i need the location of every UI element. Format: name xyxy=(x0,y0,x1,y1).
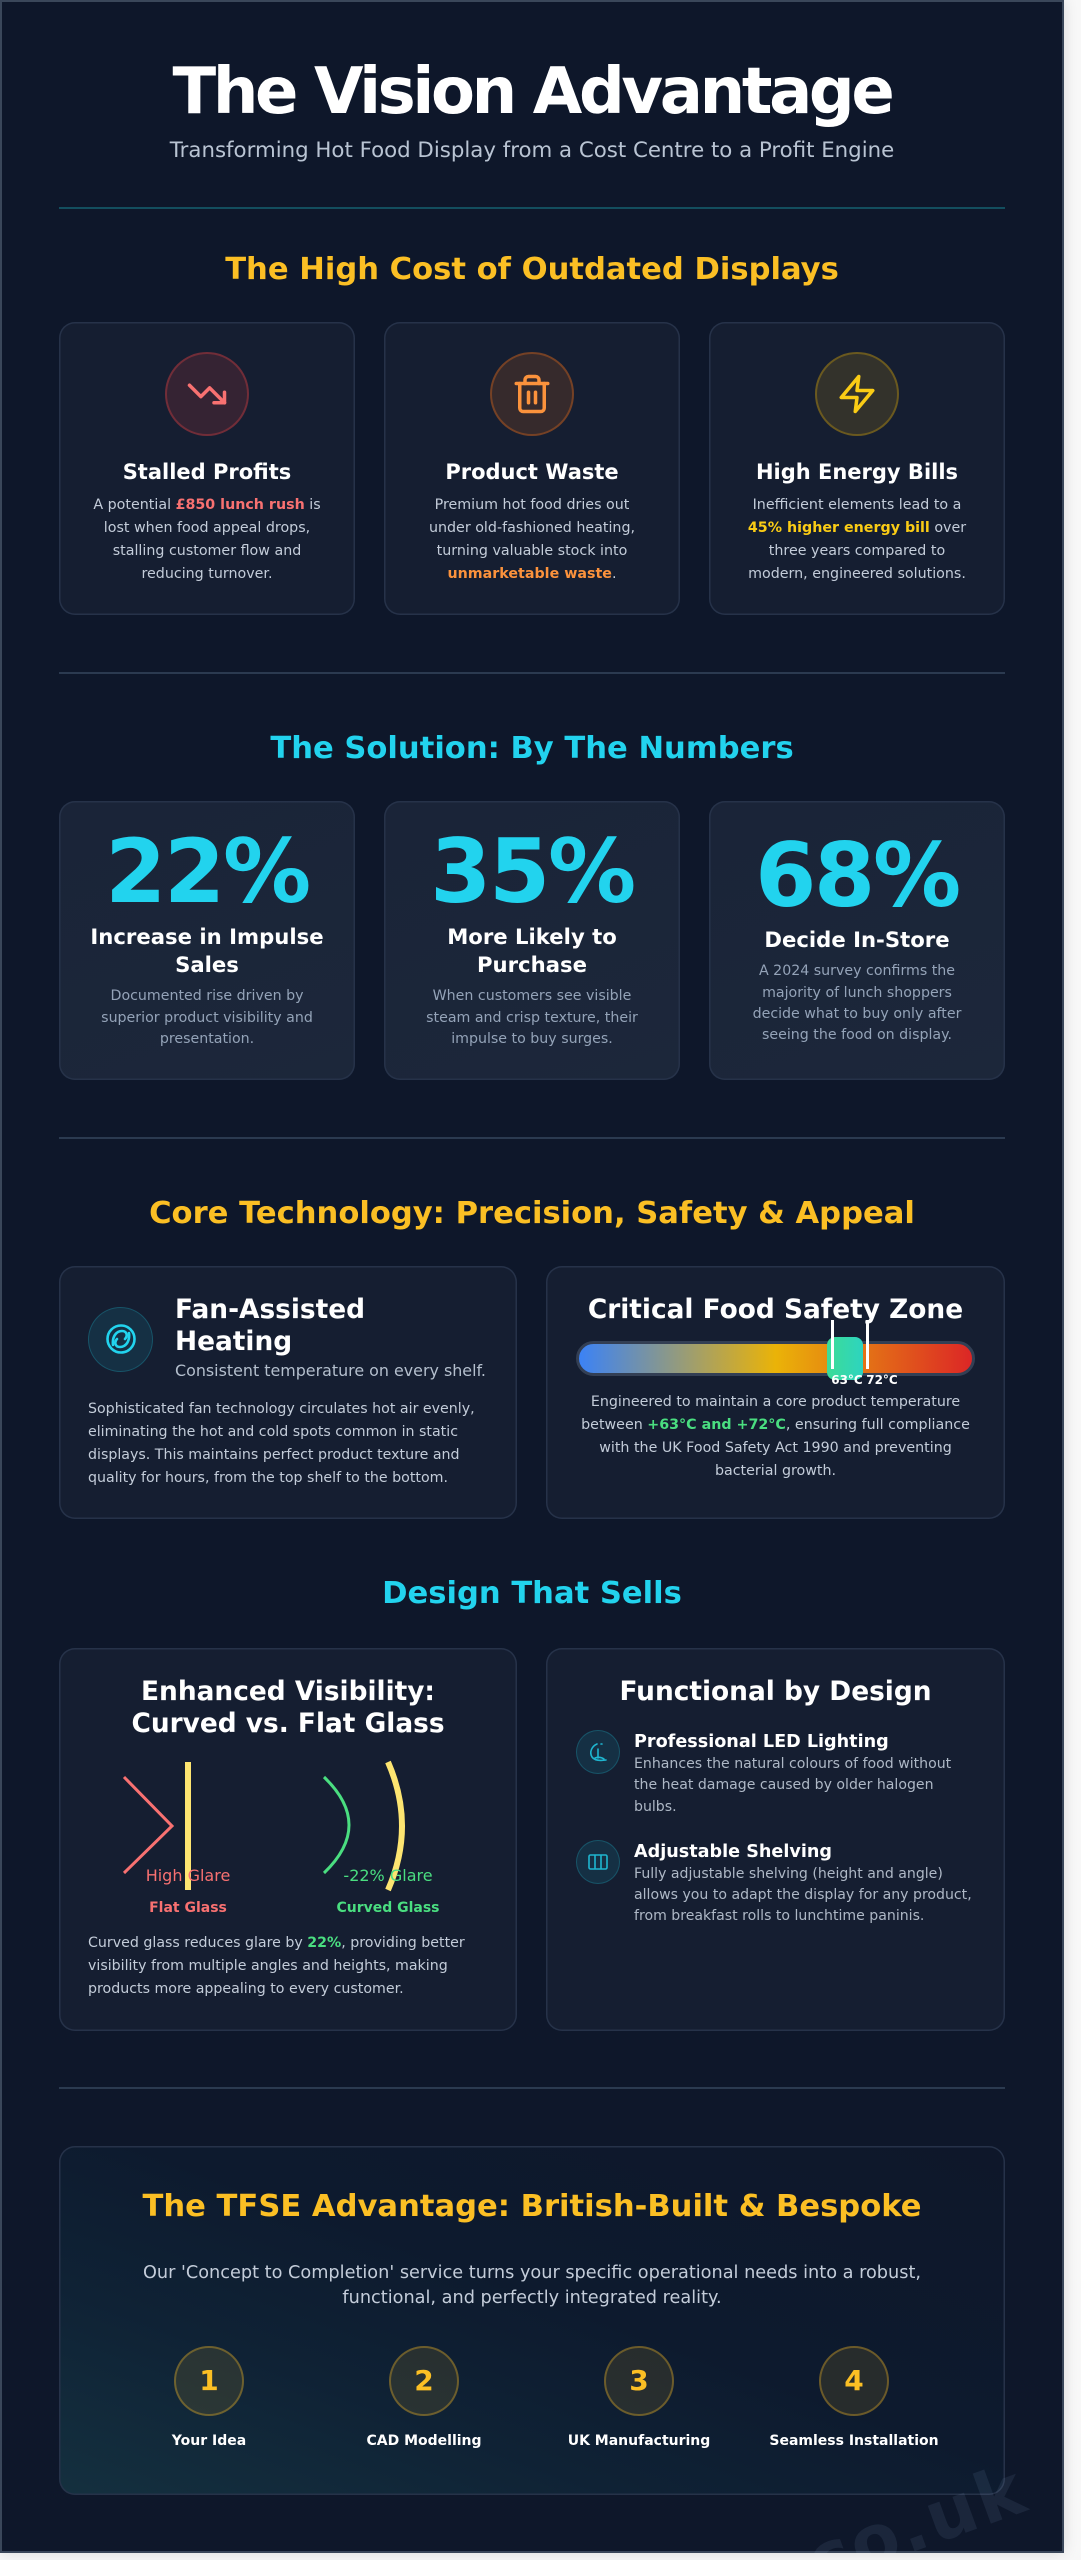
feature title: Adjustable Shelving xyxy=(634,1842,832,1862)
heading: design: Design That Sells xyxy=(382,1576,682,1611)
reduced glare label: -22% Glare xyxy=(343,1866,433,1885)
stat text: A 2024 survey confirms the xyxy=(759,963,955,979)
card text xyxy=(581,1394,970,1479)
feature text xyxy=(634,1756,951,1814)
feature title: Professional LED Lighting xyxy=(634,1732,889,1752)
panel: stat 35 percent xyxy=(384,801,680,1080)
feature text: the heat damage caused by older halogen xyxy=(634,1777,934,1793)
feature text: Fully adjustable shelving (height and angle) xyxy=(634,1866,943,1882)
stat text: seeing the food on display. xyxy=(762,1027,952,1043)
step number xyxy=(174,2346,244,2416)
stat number: 68% xyxy=(755,824,959,927)
panel: stalled profits xyxy=(59,322,355,615)
card text: three years compared to xyxy=(769,543,945,559)
stat text: When customers see visible xyxy=(433,988,631,1004)
glass comparison diagram xyxy=(123,1760,440,1916)
temperature gauge: 63°C xyxy=(831,1373,863,1387)
card text xyxy=(88,1400,475,1486)
panel: energy bills xyxy=(709,322,1005,615)
step number xyxy=(604,2346,674,2416)
card text xyxy=(748,496,966,582)
card text: between +63°C and +72°C, ensuring full compliance xyxy=(581,1417,970,1433)
flat glass label: Flat Glass xyxy=(149,1900,227,1916)
card text: reducing turnover. xyxy=(141,566,273,582)
card text: Premium hot food dries out xyxy=(435,496,629,512)
card title: High Energy Bills xyxy=(756,460,958,484)
step number: 4 xyxy=(844,2364,864,2397)
card subheading: Consistent temperature on every shelf. xyxy=(175,1361,486,1380)
icon: trash xyxy=(490,352,574,436)
card text xyxy=(429,496,635,582)
feature text: bulbs. xyxy=(634,1798,677,1814)
high glare label: High Glare xyxy=(146,1866,230,1885)
stat text: superior product visibility and xyxy=(101,1010,313,1026)
step number: 1 xyxy=(199,2364,219,2397)
card text xyxy=(88,1934,465,1997)
temperature gauge xyxy=(576,1320,975,1387)
panel: food safety zone xyxy=(546,1266,1005,1519)
title: The Vision Advantage xyxy=(173,55,891,129)
icon: lightning bolt xyxy=(815,352,899,436)
stat text: decide what to buy only after xyxy=(753,1006,961,1022)
step 3 xyxy=(568,2346,710,2449)
card heading: Fan-Assisted xyxy=(175,1294,365,1325)
step label: UK Manufacturing xyxy=(568,2433,710,2449)
card text: stalling customer flow and xyxy=(113,543,301,559)
card text: displays. This maintains perfect product texture and xyxy=(88,1447,460,1463)
panel: stat 68 percent xyxy=(709,801,1005,1080)
card text: bacterial growth. xyxy=(715,1463,836,1479)
icon: LED lighting xyxy=(576,1730,620,1774)
step number xyxy=(819,2346,889,2416)
card text: eliminating the hot and cold spots common in static xyxy=(88,1424,458,1440)
intro text xyxy=(143,2262,921,2308)
card text: visibility from multiple angles and heights, making xyxy=(88,1958,448,1974)
card title: Stalled Profits xyxy=(123,460,291,484)
stat text xyxy=(101,988,313,1047)
card heading: Enhanced Visibility: xyxy=(141,1676,435,1707)
card text: Sophisticated fan technology circulates hot air evenly, xyxy=(88,1400,475,1416)
panel: TFSE advantage xyxy=(59,2146,1005,2495)
intro text: Our 'Concept to Completion' service turns your specific operational needs into a robust, xyxy=(143,2262,921,2282)
card text: A potential £850 lunch rush is xyxy=(93,496,321,512)
feature text: allows you to adapt the display for any product, xyxy=(634,1887,972,1903)
temperature gauge: 72°C xyxy=(866,1373,898,1387)
card text: modern, engineered solutions. xyxy=(748,566,966,582)
stat label: Decide In-Store xyxy=(764,927,950,952)
icon: fan swirl xyxy=(88,1306,153,1372)
stat text: majority of lunch shoppers xyxy=(762,985,952,1001)
card heading: Critical Food Safety Zone xyxy=(588,1294,963,1325)
card heading: Heating xyxy=(175,1326,292,1357)
card text: unmarketable waste. xyxy=(448,566,616,582)
step label: CAD Modelling xyxy=(366,2433,482,2449)
step 4 xyxy=(769,2346,939,2449)
card heading: Functional by Design xyxy=(619,1676,932,1707)
stat text: Documented rise driven by xyxy=(111,988,303,1004)
card heading xyxy=(175,1294,365,1357)
step number: 3 xyxy=(629,2364,649,2397)
card text: lost when food appeal drops, xyxy=(104,520,310,536)
icon: shelving xyxy=(576,1840,620,1884)
stat number: 35% xyxy=(430,820,634,923)
step 1 xyxy=(172,2346,246,2449)
feature text: Enhances the natural colours of food without xyxy=(634,1756,951,1772)
stat label: Purchase xyxy=(477,952,587,977)
panel: fan-assisted heating xyxy=(59,1266,517,1519)
curved glass reflection xyxy=(324,1762,402,1890)
intro text: functional, and perfectly integrated reality. xyxy=(342,2288,722,2308)
stat number: 22% xyxy=(105,820,309,923)
stat text: steam and crisp texture, their xyxy=(426,1010,638,1026)
card text: quality for hours, from the top shelf to the bottom. xyxy=(88,1470,448,1486)
card text: products more appealing to every customer. xyxy=(88,1981,404,1997)
card text: 45% higher energy bill over xyxy=(748,520,966,536)
stat text xyxy=(426,988,638,1047)
panel: stat 22 percent xyxy=(59,801,355,1080)
card text: Inefficient elements lead to a xyxy=(753,496,961,512)
feature text: from breakfast rolls to lunchtime paninis. xyxy=(634,1908,924,1924)
icon: trending down xyxy=(165,352,249,436)
panel: product waste xyxy=(384,322,680,615)
flat glass reflection xyxy=(124,1762,191,1890)
feature text xyxy=(634,1866,972,1924)
stat label: More Likely to xyxy=(447,924,617,949)
stat label: Increase in Impulse xyxy=(90,924,324,949)
card text: turning valuable stock into xyxy=(437,543,627,559)
panel: functional by design xyxy=(546,1648,1005,2030)
stat text: impulse to buy surges. xyxy=(451,1031,613,1047)
card text: Engineered to maintain a core product temperature xyxy=(591,1394,960,1410)
stat label xyxy=(447,924,617,977)
step number: 2 xyxy=(414,2364,434,2397)
heading: The TFSE Advantage: British-Built & Bespoke xyxy=(142,2189,922,2224)
heading: high cost: The High Cost of Outdated Displays xyxy=(225,252,839,287)
heading: solution: The Solution: By The Numbers xyxy=(270,731,794,766)
step label: Your Idea xyxy=(172,2433,246,2449)
panel: enhanced visibility xyxy=(59,1648,517,2030)
curved glass label: Curved Glass xyxy=(336,1900,440,1916)
subtitle: Transforming Hot Food Display from a Cost Centre to a Profit Engine xyxy=(170,138,894,163)
step label: Seamless Installation xyxy=(769,2433,939,2449)
stat label: Sales xyxy=(175,952,239,977)
heading: core technology: Core Technology: Precision, Safety & Appeal xyxy=(149,1196,915,1231)
card text: with the UK Food Safety Act 1990 and preventing xyxy=(599,1440,952,1456)
step number xyxy=(389,2346,459,2416)
step 2 xyxy=(366,2346,482,2449)
stat text: presentation. xyxy=(160,1031,254,1047)
card text xyxy=(93,496,321,582)
card heading: Curved vs. Flat Glass xyxy=(131,1708,445,1739)
stat label xyxy=(90,924,324,977)
card text: Curved glass reduces glare by 22%, providing better xyxy=(88,1934,465,1950)
card heading xyxy=(131,1676,445,1739)
card title: Product Waste xyxy=(445,460,619,484)
stat text xyxy=(753,963,962,1043)
card text: under old-fashioned heating, xyxy=(429,520,635,536)
